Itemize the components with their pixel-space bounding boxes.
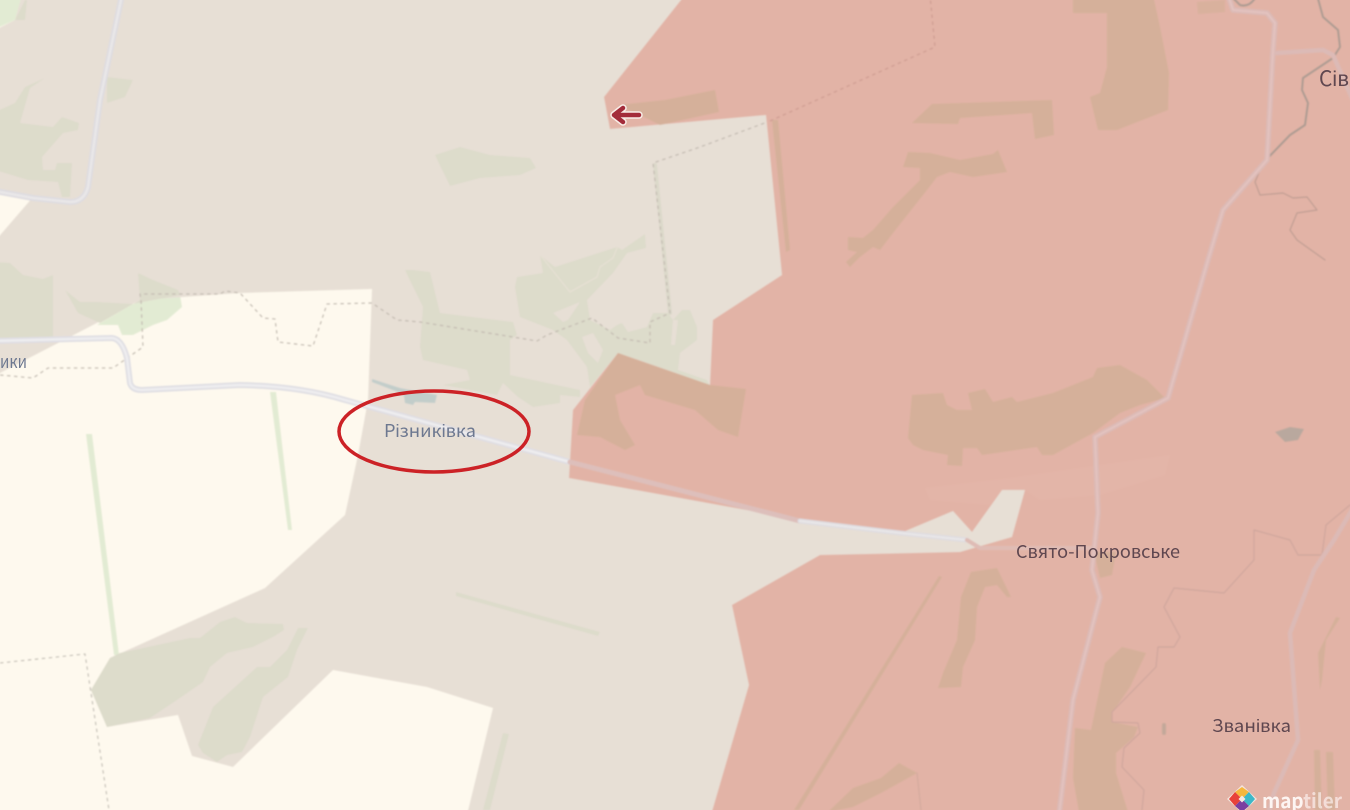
icon: maptiler diamond (1227, 785, 1257, 810)
label: Званівка: Званівка (1212, 713, 1291, 738)
lighter patch in red (925, 455, 1170, 505)
green areas on cream (86, 295, 292, 655)
occupied territory in red (569, 0, 1350, 810)
water pond near Різниківка (372, 379, 437, 405)
label: Різниківка: Різниківка (384, 418, 476, 443)
dashed borders on beige and cream (0, 121, 770, 810)
road: main beige section (0, 0, 570, 462)
roads on red (570, 0, 1350, 810)
forests on beige (0, 0, 712, 810)
forests on red (577, 0, 1340, 810)
green corner top-left (0, 0, 24, 29)
dashed border on red (770, 0, 935, 121)
forest clearings (553, 302, 678, 363)
icon: front movement arrow (614, 108, 639, 122)
label: Сів: Сів (1319, 63, 1349, 93)
label: ики: ики (0, 348, 27, 374)
small water bodies (1275, 427, 1304, 442)
label: Свято-Покровське: Свято-Покровське (1016, 538, 1180, 564)
logo: maptiler (1227, 785, 1342, 810)
forest tracks (541, 165, 670, 313)
rivers (917, 0, 1350, 810)
red ellipse highlighting Різниківка (339, 391, 529, 472)
